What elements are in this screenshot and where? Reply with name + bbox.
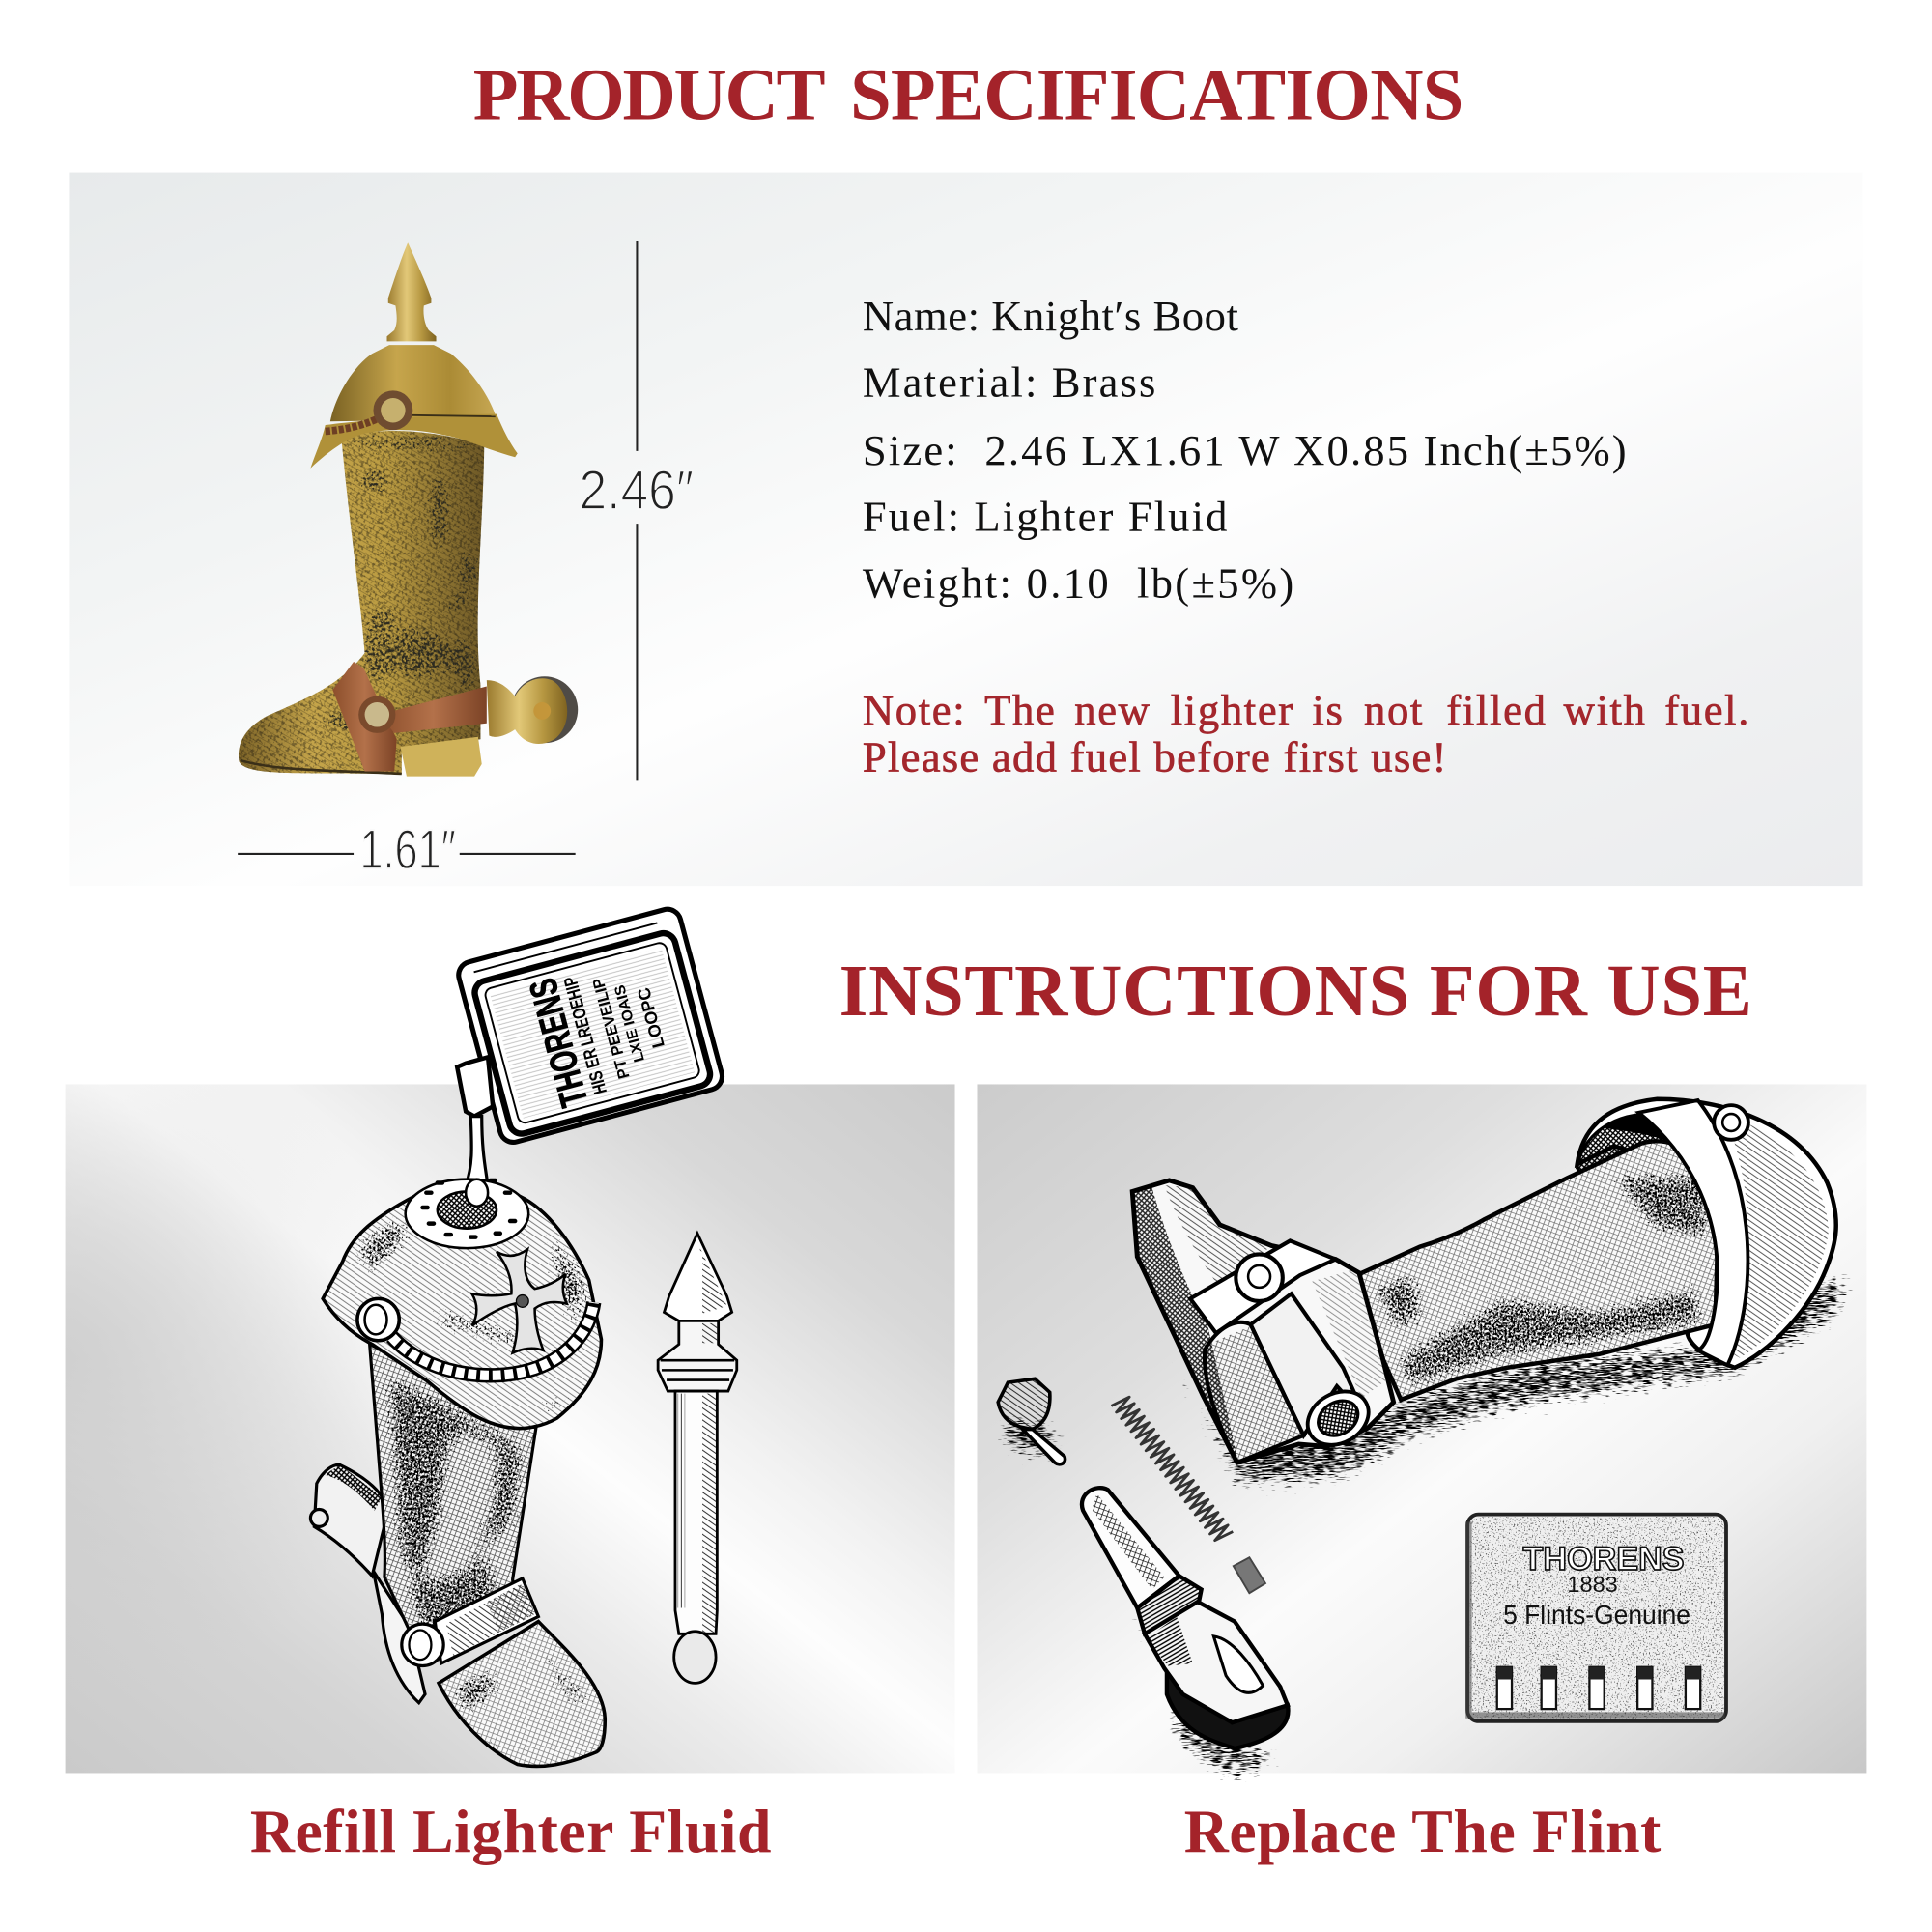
shaft [1356, 1141, 1719, 1400]
fuel note: The [984, 686, 1056, 734]
sole and foot [1132, 1180, 1394, 1463]
fuel note [863, 686, 1750, 781]
shaft shading [1355, 1140, 1725, 1405]
helmet brim [310, 414, 518, 469]
illustration: spring [1112, 1397, 1233, 1541]
boot body [239, 431, 484, 774]
illustration: lying boot [1132, 1099, 1836, 1463]
illustration: flint wheel tube [1082, 1488, 1288, 1748]
foot [439, 1622, 605, 1766]
fuel note: is [1312, 686, 1345, 734]
copper straps [332, 662, 487, 771]
card flint slots [1497, 1667, 1700, 1709]
panel background [69, 173, 1863, 886]
caption: refill lighter fluid: Refill Lighter Fluid [250, 1797, 771, 1865]
illustration: upright boot with helmet [310, 1179, 610, 1775]
illustration: flint card [1467, 1515, 1726, 1721]
illustration: fuel can: LOOPC [634, 985, 668, 1050]
illustration: fuel can [456, 906, 725, 1146]
fuel note: Please add fuel before first use! [863, 732, 1446, 781]
fuel note: fuel. [1664, 686, 1750, 734]
panel: product specifications [69, 173, 1863, 886]
helmet cross [472, 1249, 567, 1353]
drop [466, 1179, 488, 1207]
fuel note: not [1364, 686, 1424, 734]
boot heel [401, 737, 482, 777]
illustration: fuel filler rod [658, 1234, 737, 1683]
spur connector and ball [487, 678, 567, 744]
illustration: fuel can nozzle and drip [457, 1057, 493, 1203]
helmet band and rivet [1638, 1100, 1748, 1365]
card year: 1883 [1567, 1572, 1618, 1597]
title: product specifications: SPECIFICATIONS [850, 54, 1463, 136]
boot sole line [241, 760, 402, 774]
title: product specifications [473, 54, 1463, 136]
illustration: flint screw [998, 1378, 1065, 1464]
heel opening [1298, 1380, 1378, 1456]
specification list: Fuel: Lighter Fluid [863, 493, 1227, 541]
helmet rope [392, 1302, 594, 1376]
height dimension: 2.46 in: 2.46″ [579, 460, 694, 522]
helmet rivet [357, 1298, 399, 1341]
helmet dome [330, 345, 497, 421]
fuel note: Note: [863, 686, 966, 734]
helmet shading [321, 1182, 604, 1430]
illustration: fuel can: LXIE IOAIS [611, 983, 648, 1064]
specification list: Name: Knight′s Boot [863, 292, 1238, 340]
ankle strap and rivet [402, 1578, 538, 1665]
helmet top flange [406, 1179, 528, 1248]
vertical strap [373, 1571, 425, 1703]
fuel note: new [1074, 686, 1151, 734]
spur disc [511, 676, 578, 743]
foot straps [1190, 1240, 1365, 1463]
helmet interior [1577, 1114, 1722, 1269]
fuel note: filled [1446, 686, 1548, 734]
panel: refill lighter fluid [66, 906, 955, 1865]
helmet rope and rivet [326, 390, 496, 431]
product photo: brass boot lighter [234, 242, 578, 782]
card brand: THORENS [1523, 1541, 1685, 1577]
illustration: fuel can: HIS ER LREOEHIP [560, 974, 611, 1096]
helmet spike [387, 242, 437, 341]
width dimension: 1.61 in: 1.61″ [359, 819, 456, 881]
panel: replace the flint [977, 1084, 1866, 1865]
panel background [66, 1084, 955, 1773]
helmet back [1577, 1099, 1836, 1368]
foot shading [440, 1623, 605, 1766]
can brand text: THORENS [522, 974, 596, 1111]
specification list: Weight: 0.10 lb(±5%) [863, 559, 1293, 608]
specification list [863, 292, 1627, 608]
title: product specifications: PRODUCT [473, 54, 826, 136]
shaft [370, 1345, 536, 1651]
illustration: fuel can: PT PEEVEILIP [589, 976, 634, 1081]
boot texture [234, 431, 493, 782]
panel background [977, 1084, 1866, 1773]
fuel note: with [1564, 686, 1647, 734]
card label: 5 Flints-Genuine [1503, 1600, 1690, 1630]
heading: instructions for use: INSTRUCTIONS FOR USE [839, 950, 1752, 1032]
specification list: Material: Brass [863, 358, 1155, 407]
caption: replace the flint: Replace The Flint [1184, 1797, 1661, 1865]
foot shading [1132, 1185, 1386, 1463]
helmet [323, 1185, 601, 1429]
spur [310, 1464, 385, 1576]
shaft shading [370, 1347, 535, 1626]
illustration: ground shadow hatching [985, 1269, 1861, 1786]
specification list: Size: 2.46 LX1.61 W X0.85 Inch(±5%) [863, 426, 1627, 474]
illustration: flint [1234, 1557, 1265, 1593]
fuel note: lighter [1171, 686, 1294, 734]
